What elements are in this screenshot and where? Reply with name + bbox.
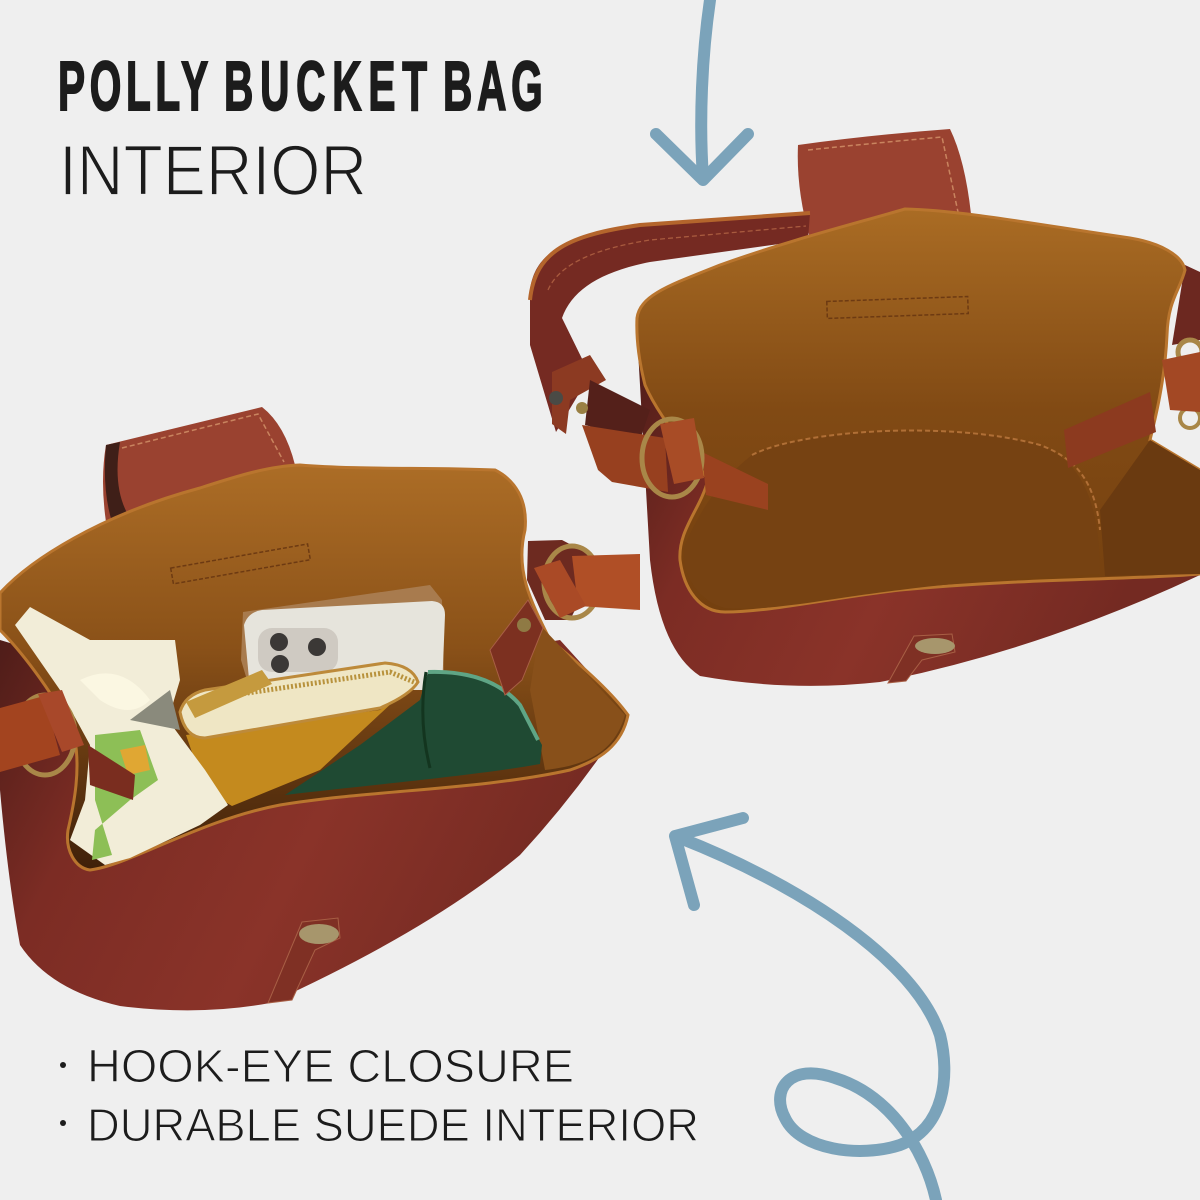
open empty bag, upper right <box>530 129 1200 686</box>
title: product name: BUCKET <box>224 48 427 126</box>
packed bag, lower left <box>0 407 640 1010</box>
side strap and buckle <box>527 540 600 620</box>
title: product name: BAG <box>443 48 543 126</box>
front tab with snap <box>888 634 955 683</box>
feature list <box>60 1040 699 1151</box>
front tab with snap <box>268 918 340 1003</box>
stitched patch <box>171 544 310 584</box>
arrow: bottom, looping, pointing to packed bag <box>675 818 944 1200</box>
stitched patch <box>827 297 968 318</box>
feature: closure: HOOK-EYE CLOSURE <box>87 1040 574 1092</box>
exterior body <box>0 640 628 1010</box>
title <box>58 48 543 211</box>
arrow: top, pointing to open bag <box>656 0 748 180</box>
title: subtitle: INTERIOR <box>59 132 367 211</box>
back handle strap <box>103 407 295 522</box>
title: product name <box>58 48 543 126</box>
feature: suede: DURABLE SUEDE INTERIOR <box>87 1099 699 1151</box>
interior suede <box>637 209 1200 612</box>
shoulder strap <box>530 213 810 432</box>
back handle strap <box>798 129 971 238</box>
title: product name: POLLY <box>58 48 208 126</box>
green pouch <box>285 672 542 795</box>
shaded right interior <box>1100 440 1200 576</box>
left buckle strap <box>582 425 668 492</box>
right buckle strap <box>1064 392 1156 468</box>
exterior body <box>638 350 1200 686</box>
side tab and rivets <box>552 355 606 434</box>
interior floor <box>684 431 1100 609</box>
phone in case <box>241 585 444 690</box>
right strap end <box>1172 265 1200 345</box>
patterned scarf <box>15 607 228 865</box>
yellow zip wallet <box>186 700 395 806</box>
shaded inner right wall <box>530 625 625 770</box>
right inner tab <box>490 600 543 695</box>
interior suede <box>0 465 628 870</box>
left buckle strap <box>15 695 75 775</box>
